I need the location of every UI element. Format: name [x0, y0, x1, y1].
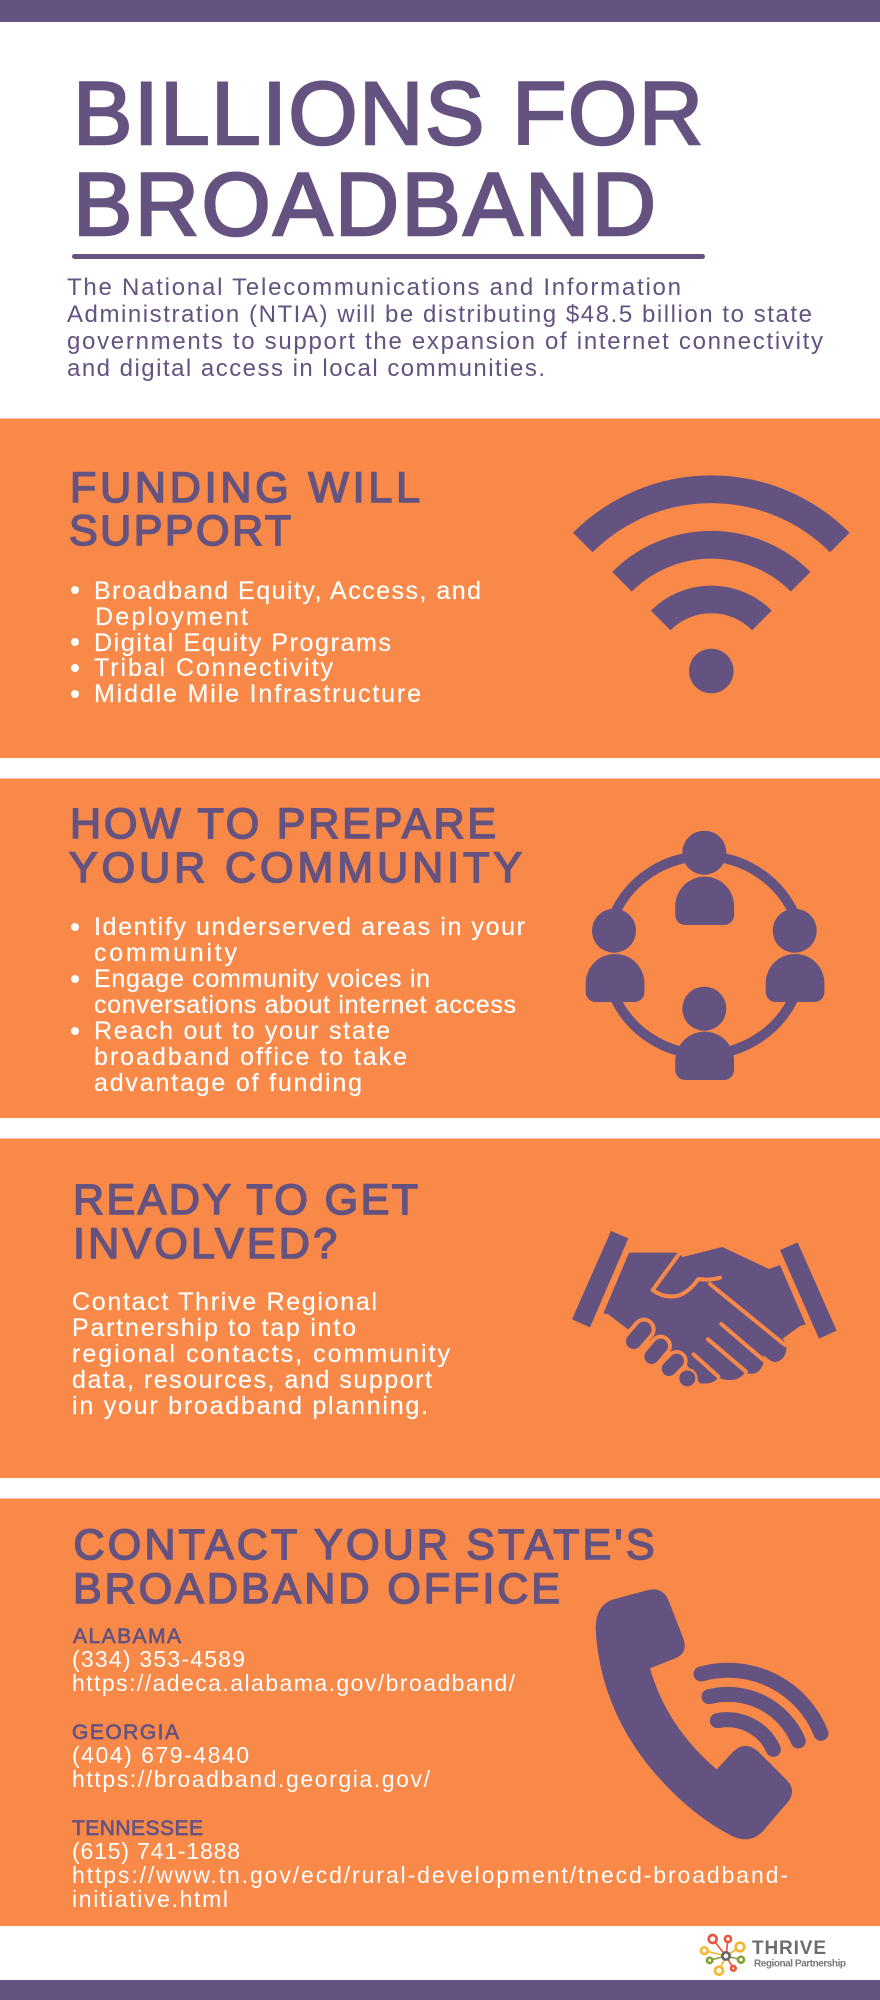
- title: BILLIONS FOR: [73, 63, 703, 163]
- heading: contact your state's: CONTACT YOUR STATE'S: [74, 1521, 654, 1569]
- bullet list: prepare: conversations about internet access: [94, 991, 516, 1019]
- intro paragraph: Administration (NTIA) will be distributing $48.5 billion to state: [67, 301, 812, 328]
- panel: funding will support: [0, 418, 880, 758]
- icon: people circle: [586, 831, 824, 1080]
- contact: georgia: (404) 679-4840: [72, 1742, 249, 1768]
- heading: contact your state's: BROADBAND OFFICE: [73, 1565, 560, 1613]
- bullet list: prepare: Engage community voices in: [94, 965, 430, 993]
- title: [73, 63, 703, 254]
- body text: contact thrive: [72, 1288, 450, 1420]
- contact: tennessee: initiative.html: [72, 1886, 228, 1912]
- heading: how to prepare: HOW TO PREPARE: [70, 800, 496, 848]
- contact: alabama: ALABAMA: [73, 1625, 181, 1648]
- contact: tennessee: (615) 741-1888: [72, 1838, 240, 1864]
- bullet list: prepare: [71, 913, 525, 1097]
- contact: georgia: https://broadband.georgia.gov/: [72, 1766, 431, 1792]
- heading: how to prepare: [69, 800, 522, 892]
- body text: contact thrive: data, resources, and support: [72, 1366, 432, 1394]
- icon: telephone: [596, 1589, 821, 1839]
- body text: contact thrive: Partnership to tap into: [72, 1314, 356, 1342]
- heading: ready to get involved: READY TO GET: [73, 1176, 418, 1224]
- bullet list: prepare: broadband office to take: [94, 1043, 407, 1071]
- title: BROADBAND: [73, 154, 656, 254]
- bottom bar: [0, 1980, 880, 2000]
- logo: Thrive Regional Partnership: Regional Partnership: [754, 1958, 846, 1970]
- bullet list: funding: Broadband Equity, Access, and: [94, 577, 481, 605]
- title underline: [72, 254, 705, 259]
- bullet list: funding: Tribal Connectivity: [94, 654, 334, 682]
- bullet list: funding: [71, 577, 481, 708]
- top bar: [0, 0, 880, 22]
- panel: how to prepare your community: [0, 778, 880, 1118]
- body text: contact thrive: Contact Thrive Regional: [72, 1288, 377, 1316]
- logo mark: [701, 1935, 744, 1975]
- heading: ready to get involved: [73, 1176, 418, 1268]
- contact: tennessee: https://www.tn.gov/ecd/rural-development/tnecd-broadband-: [72, 1862, 788, 1888]
- icon: handshake: [572, 1231, 837, 1384]
- bullet list: prepare: community: [94, 939, 238, 967]
- panel: contact your state's broadband office: [0, 1498, 880, 1926]
- intro paragraph: governments to support the expansion of internet connectivity: [67, 328, 823, 355]
- heading: how to prepare: YOUR COMMUNITY: [69, 844, 522, 892]
- body text: contact thrive: regional contacts, community: [72, 1340, 450, 1368]
- intro paragraph: and digital access in local communities.: [67, 355, 545, 382]
- contact: alabama: (334) 353-4589: [72, 1646, 245, 1672]
- panel: ready to get involved: [0, 1138, 880, 1478]
- bullet list: funding: Deployment: [95, 603, 248, 631]
- intro paragraph: The National Telecommunications and Information: [67, 274, 681, 301]
- contact: tennessee: [72, 1817, 788, 1912]
- contact: georgia: [72, 1721, 431, 1792]
- icon: wifi: [583, 489, 840, 693]
- bullet list: funding: Digital Equity Programs: [94, 629, 391, 657]
- bullet list: prepare: Identify underserved areas in your: [94, 913, 525, 941]
- logo: Thrive Regional Partnership: [701, 1935, 846, 1975]
- logo: Thrive Regional Partnership: THRIVE: [752, 1938, 826, 1959]
- heading: ready to get involved: INVOLVED?: [73, 1220, 337, 1268]
- bullet list: prepare: advantage of funding: [94, 1069, 362, 1097]
- contact: alabama: [72, 1625, 516, 1696]
- heading: contact your state's: [73, 1521, 654, 1613]
- body text: contact thrive: in your broadband planning.: [72, 1392, 428, 1420]
- intro paragraph: [67, 274, 823, 382]
- contact: tennessee: TENNESSEE: [72, 1817, 203, 1840]
- contact: georgia: GEORGIA: [72, 1721, 179, 1744]
- heading: funding will support: [69, 464, 420, 555]
- heading: funding will support: SUPPORT: [69, 507, 291, 555]
- heading: funding will support: FUNDING WILL: [70, 464, 420, 512]
- bullet list: funding: Middle Mile Infrastructure: [94, 680, 421, 708]
- bullet list: prepare: Reach out to your state: [94, 1017, 390, 1045]
- contact: alabama: https://adeca.alabama.gov/broadband/: [72, 1670, 516, 1696]
